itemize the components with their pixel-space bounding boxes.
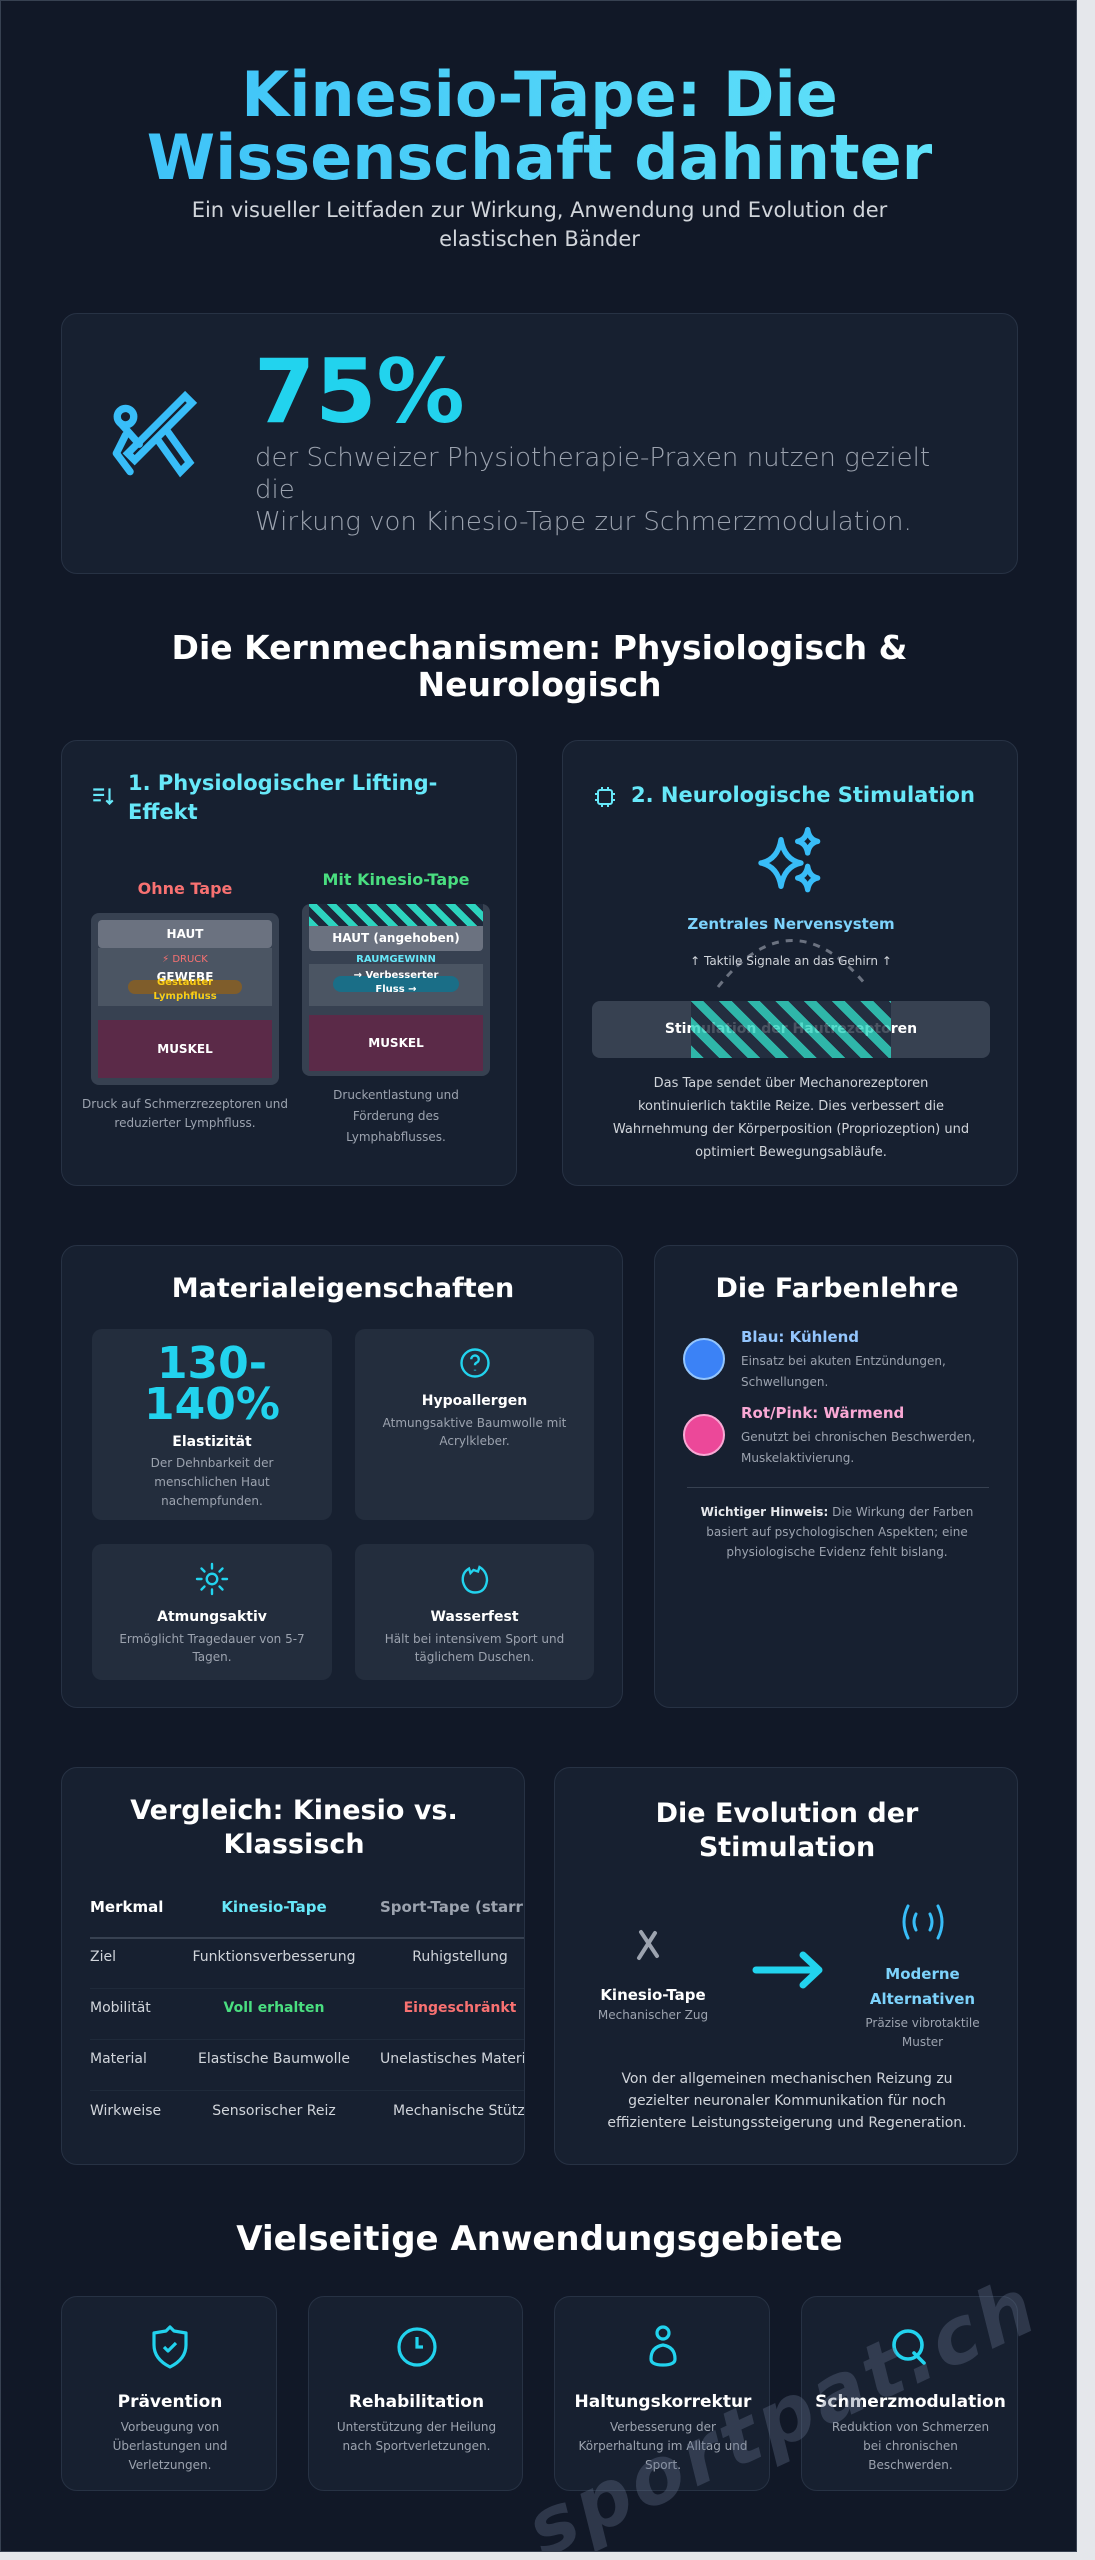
- heading: [656, 1798, 918, 1863]
- item: blue: [683, 1328, 946, 1389]
- heading: [130, 1795, 458, 1860]
- stat number: 75%: [254, 340, 465, 443]
- diagram: without tape: GEWEBE: [157, 970, 213, 984]
- heading: mechanisms: Die Kernmechanismen: Physiologisch & Neurologisch: [172, 628, 907, 704]
- table: Wirkweise: [90, 2103, 161, 2119]
- label: ohne tape: Ohne Tape: [138, 879, 232, 898]
- diagram: without tape: [91, 913, 279, 1085]
- title: [1, 63, 1078, 189]
- paragraph: Von der allgemeinen mechanischen Reizung zu gezielter neuronaler Kommunikation für noch effizientere Leistungssteigerung und Regeneration.: [607, 2071, 967, 2131]
- table: Kinesio-Tape: [221, 1898, 327, 1916]
- tile: elasticity: 140%: [144, 1379, 280, 1430]
- panel: neurological: [562, 740, 1018, 1186]
- card: pain: Reduktion von Schmerzen bei chronischen Beschwerden.: [832, 2420, 989, 2472]
- tile: breathable: Ermöglicht Tragedauer von 5-7 Tagen.: [119, 1632, 305, 1664]
- tile: elasticity: Der Dehnbarkeit der menschlichen Haut nachempfunden.: [151, 1456, 273, 1508]
- caption left: Druck auf Schmerzrezeptoren und reduzierter Lymphfluss.: [82, 1097, 288, 1130]
- heading: applications: Vielseitige Anwendungsgebiete: [236, 2219, 843, 2259]
- item: blue: Blau: Kühlend: [741, 1328, 859, 1346]
- card: pain: Schmerzmodulation: [815, 2392, 1006, 2412]
- card: pain: [801, 2296, 1018, 2491]
- item: pink: [683, 1404, 975, 1465]
- icon: sparkles: [758, 827, 820, 892]
- tile: hypoallergen: [355, 1329, 594, 1520]
- bar: stimulation: Stimulation der Hautrezeptoren: [665, 1021, 917, 1037]
- table: Voll erhalten: [224, 2000, 324, 2016]
- tile: hypoallergen: Atmungsaktive Baumwolle mit Acrylkleber.: [383, 1416, 566, 1448]
- card: prevention: Prävention: [118, 2392, 222, 2412]
- tile: elasticity: [92, 1329, 332, 1520]
- diagram: without tape: HAUT: [167, 927, 203, 941]
- subtitle: Ein visueller Leitfaden zur Wirkung, Anwendung und Evolution der elastischen Bänder: [192, 198, 887, 251]
- icon: x: [636, 1930, 660, 1960]
- stat text: [255, 443, 930, 537]
- note: Wichtiger Hinweis: Die Wirkung der Farben basiert auf psychologischen Aspekten; eine physiologische Evidenz fehlt bislang.: [701, 1505, 973, 1559]
- label: kinesio: Mechanischer Zug: [598, 2008, 708, 2022]
- paragraph: Das Tape sendet über Mechanorezeptoren: [654, 1076, 928, 1091]
- item: pink: Genutzt bei chronischen Beschwerden, Muskelaktivierung.: [741, 1430, 975, 1465]
- diagram: with tape: RAUMGEWINN: [356, 954, 436, 965]
- table: Funktionsverbesserung: [192, 1949, 356, 1965]
- tile: waterproof: Hält bei intensivem Sport und täglichem Duschen.: [385, 1632, 564, 1664]
- table: Eingeschränkt: [404, 2000, 516, 2016]
- label: modern: Moderne: [885, 1965, 960, 1983]
- icon: chip: [595, 787, 615, 807]
- heading: Die Evolution der: [656, 1798, 918, 1829]
- diagram: without tape: Lymphfluss: [153, 991, 217, 1002]
- caption right: Druckentlastung und Förderung des Lymphabflusses.: [333, 1088, 459, 1144]
- tile: elasticity: 130-: [157, 1338, 267, 1389]
- bar: stimulation: [592, 1001, 990, 1058]
- heading: Materialeigenschaften: [172, 1273, 514, 1304]
- icon: vibration: [902, 1904, 944, 1940]
- table: Elastische Baumwolle: [198, 2051, 350, 2067]
- table: Mobilität: [90, 2000, 151, 2016]
- label: modern: [865, 1965, 980, 2049]
- tile: elasticity: Elastizität: [172, 1434, 252, 1450]
- arrow: [752, 1952, 822, 1988]
- tile: breathable: Atmungsaktiv: [157, 1609, 267, 1625]
- tile: waterproof: Wasserfest: [430, 1609, 519, 1625]
- table: Ruhigstellung: [412, 1949, 508, 1965]
- icon: tape: [112, 390, 198, 478]
- card: posture: Verbesserung der Körperhaltung im Alltag und Sport.: [579, 2420, 747, 2472]
- panel: material: [61, 1245, 623, 1708]
- card: rehabilitation: [308, 2296, 523, 2491]
- diagram: with tape: → Verbesserter: [354, 970, 438, 981]
- table: Merkmal: [90, 1898, 163, 1916]
- diagram: with tape: MUSKEL: [368, 1036, 424, 1050]
- item: blue: Einsatz bei akuten Entzündungen, Schwellungen.: [741, 1354, 946, 1389]
- table: [90, 1898, 525, 2119]
- item: pink: Rot/Pink: Wärmend: [741, 1404, 904, 1422]
- table: Material: [90, 2051, 147, 2067]
- label: mit tape: Mit Kinesio-Tape: [322, 870, 470, 889]
- diagram: with tape: Fluss →: [375, 984, 417, 995]
- panel: stat: [61, 313, 1018, 574]
- title: Wissenschaft dahinter: [147, 121, 932, 194]
- card: rehabilitation: Unterstützung der Heilung nach Sportverletzungen.: [337, 2420, 496, 2453]
- label: signals: ↑ Taktile Signale an das Gehirn ↑: [690, 954, 892, 968]
- heading: Die Farbenlehre: [715, 1273, 959, 1304]
- panel: colors: [654, 1245, 1018, 1708]
- label: modern: Alternativen: [870, 1990, 975, 2008]
- diagram: without tape: ⚡ DRUCK: [162, 954, 208, 965]
- title: Kinesio-Tape: Die: [241, 58, 838, 131]
- diagram: with tape: [302, 904, 490, 1076]
- diagram: without tape: Gestauter: [157, 977, 213, 988]
- panel: comparison: [61, 1767, 525, 2165]
- stat text: der Schweizer Physiotherapie-Praxen nutzen gezielt die: [255, 443, 930, 505]
- heading: Klassisch: [223, 1829, 365, 1860]
- label: modern: Präzise vibrotaktile Muster: [865, 2016, 980, 2049]
- diagram: without tape: MUSKEL: [157, 1042, 213, 1056]
- tile: hypoallergen: Hypoallergen: [422, 1393, 527, 1409]
- diagram: with tape: HAUT (angehoben): [332, 931, 460, 945]
- panel: evolution: [554, 1767, 1018, 2165]
- card: prevention: [61, 2296, 277, 2491]
- heading: Vergleich: Kinesio vs.: [130, 1795, 458, 1826]
- label: CNS: Zentrales Nervensystem: [687, 915, 895, 933]
- card: posture: [554, 2296, 770, 2491]
- card: prevention: Vorbeugung von Überlastungen und Verletzungen.: [113, 2420, 227, 2472]
- table: Ziel: [90, 1949, 116, 1965]
- heading: 2. Neurologische Stimulation: [631, 783, 975, 807]
- heading: 1. Physiologischer Lifting-Effekt: [128, 771, 437, 824]
- label: kinesio: Kinesio-Tape: [600, 1986, 706, 2004]
- table: Sensorischer Reiz: [212, 2103, 336, 2119]
- heading: Stimulation: [699, 1832, 875, 1863]
- paragraph: kontinuierlich taktile Reize. Dies verbessert die Wahrnehmung der Körperposition (Propriozeption) und optimiert Bewegungsabläufe.: [613, 1099, 969, 1160]
- tile: waterproof: [355, 1544, 594, 1680]
- icon: list: [93, 788, 114, 805]
- stat text: Wirkung von Kinesio-Tape zur Schmerzmodulation.: [255, 507, 912, 537]
- tile: breathable: [92, 1544, 332, 1680]
- dashed arc: [717, 939, 864, 988]
- panel: lifting effect: [61, 740, 517, 1186]
- card: rehabilitation: Rehabilitation: [349, 2392, 484, 2412]
- card: posture: Haltungskorrektur: [575, 2392, 751, 2412]
- label: kinesio: [598, 1986, 708, 2022]
